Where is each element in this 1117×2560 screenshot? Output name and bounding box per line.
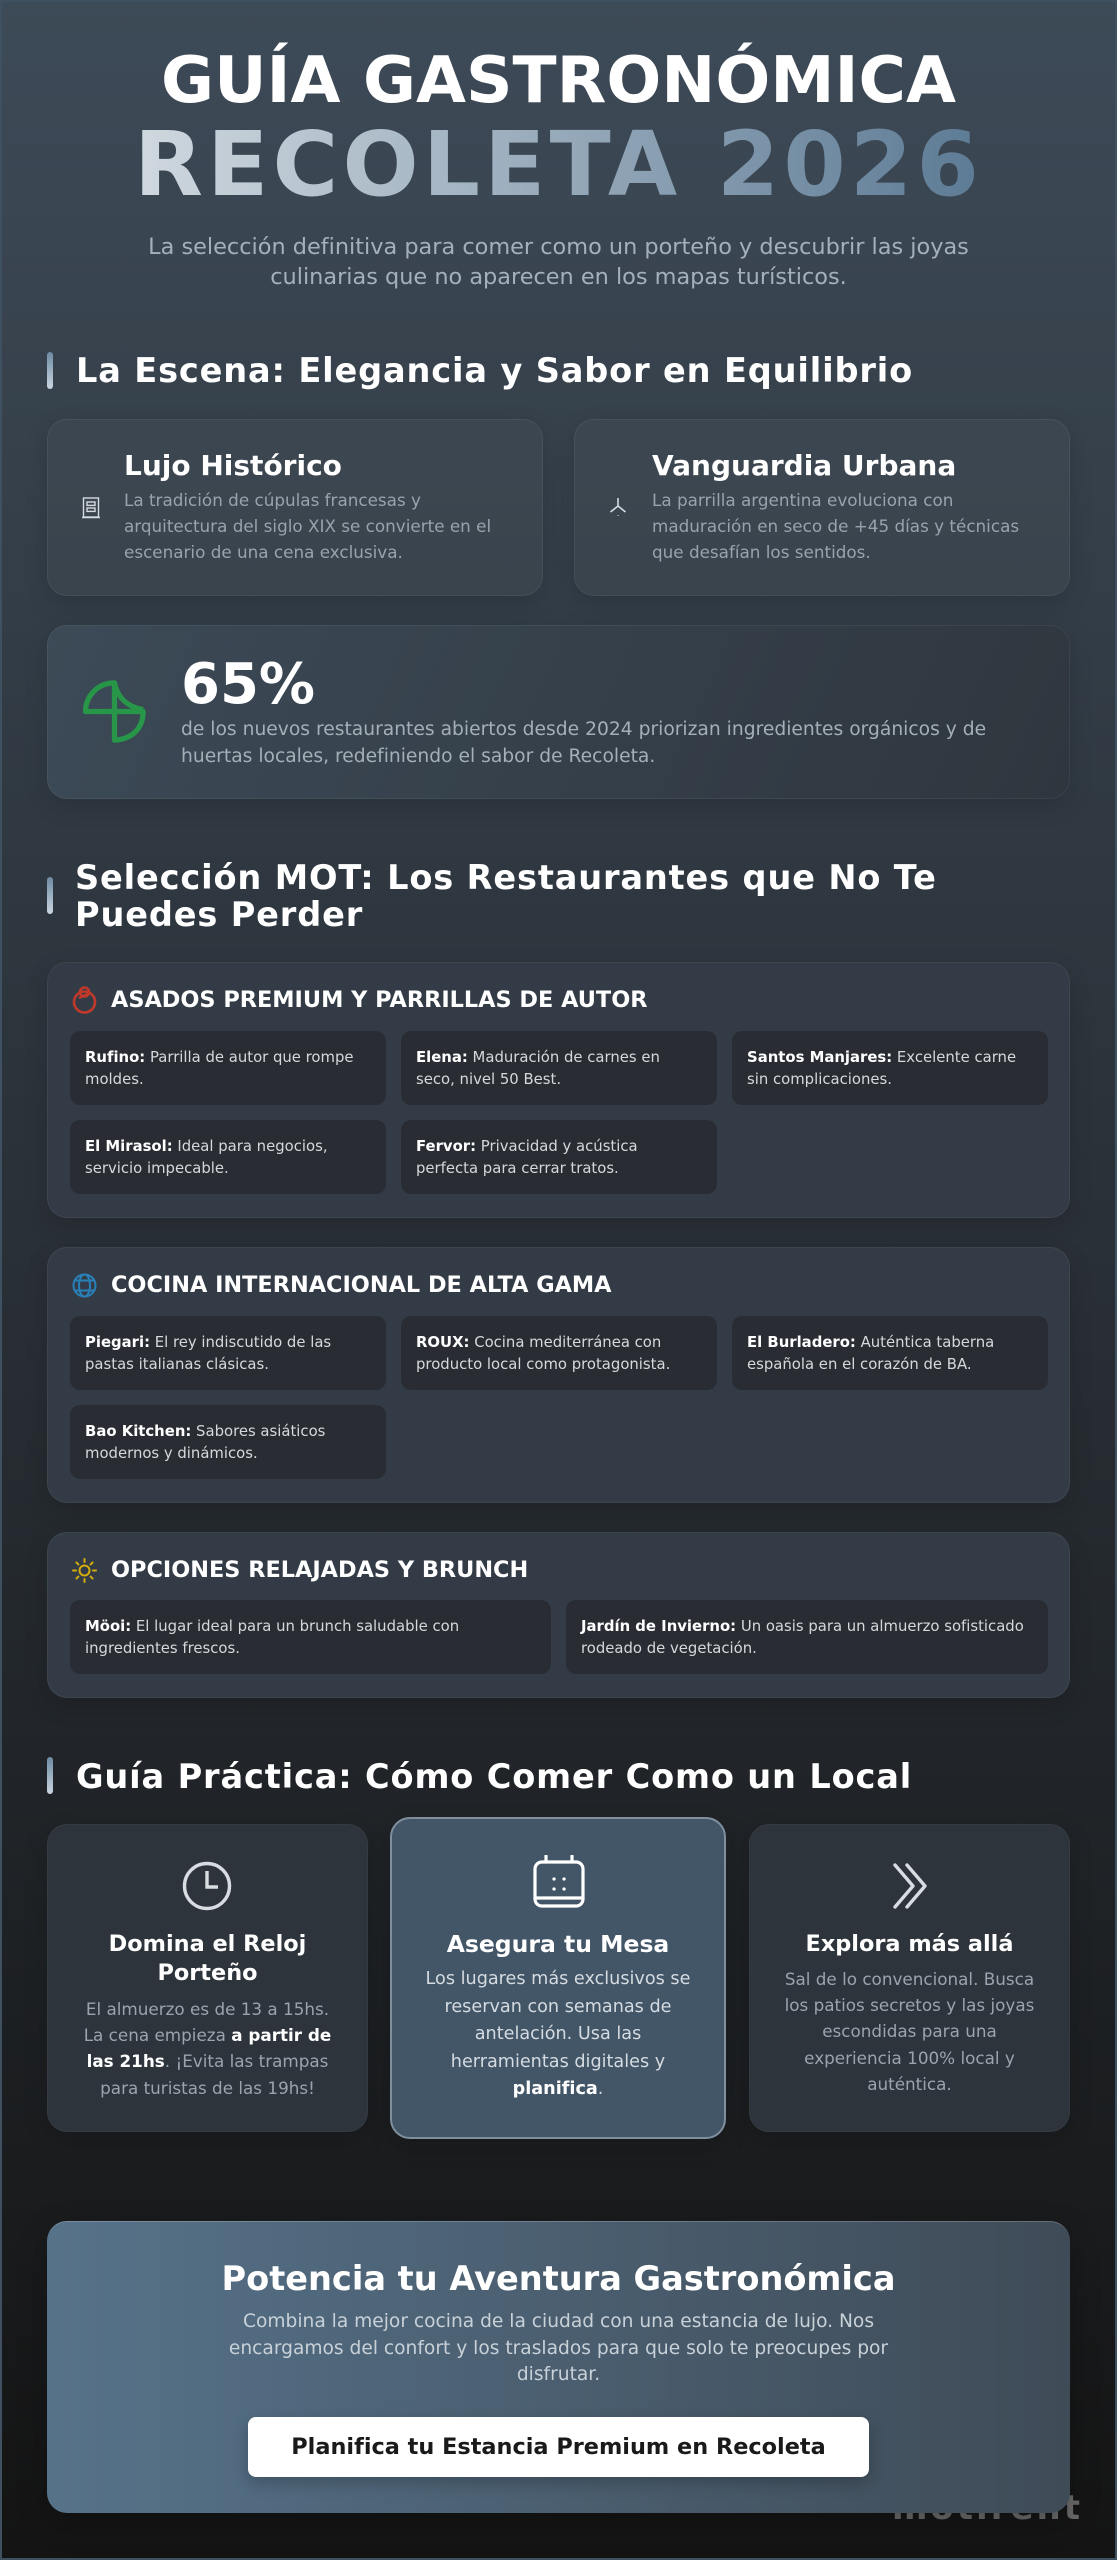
guide card: asegura tu mesa (highlighted) (390, 1817, 726, 2139)
card title: Domina el Reloj (109, 1931, 306, 1957)
item: roux: producto local como protagonista. (416, 1355, 670, 1373)
section accent: seleccion (47, 877, 53, 914)
icon: double chevron (893, 1863, 927, 1909)
item: bao kitchen (70, 1405, 386, 1479)
item: elena: Elena: Maduración de carnes en (416, 1048, 660, 1066)
card description: herramientas digitales y (451, 2052, 665, 2072)
item: elena (401, 1031, 717, 1105)
item: el mirasol (70, 1120, 386, 1194)
item: bao kitchen: modernos y dinámicos. (85, 1444, 258, 1462)
card title: Lujo Histórico (124, 449, 342, 482)
item: rufino: moldes. (85, 1070, 144, 1088)
watermark: motirent: motirent (892, 2488, 1083, 2528)
card description: arquitectura del siglo XIX se convierte en el (124, 516, 491, 536)
stat description (181, 719, 986, 767)
intro text: La selección definitiva para comer como un porteño y descubrir las joyas (148, 234, 969, 260)
card title: Asegura tu Mesa (447, 1930, 669, 1958)
cta description: Combina la mejor cocina de la ciudad con una estancia de lujo. Nos (243, 2311, 874, 2332)
item: el burladero: española en el corazón de BA. (747, 1355, 972, 1373)
card description: las 21hs. ¡Evita las trampas (87, 2051, 328, 2071)
item: el mirasol: servicio impecable. (85, 1159, 229, 1177)
item: el burladero (732, 1316, 1048, 1390)
panel heading: OPCIONES RELAJADAS Y BRUNCH (111, 1557, 528, 1583)
card description: auténtica. (867, 2074, 952, 2094)
cta panel (47, 2221, 1070, 2513)
guide card: domina el reloj (47, 1824, 368, 2132)
item: mooi (70, 1600, 551, 1674)
card description (652, 490, 1019, 562)
section heading: seleccion mot (75, 858, 937, 934)
item: roux (401, 1316, 717, 1390)
item: jardin de invierno: Jardín de Invierno: Un oasis para un almuerzo sofisticado (581, 1617, 1024, 1635)
cta description: disfrutar. (517, 2364, 600, 2385)
item: bao kitchen: Bao Kitchen: Sabores asiáticos (85, 1422, 325, 1440)
card title: Explora más allá (806, 1931, 1013, 1957)
card: lujo historico (47, 419, 543, 596)
icon: yellow sun (72, 1558, 97, 1583)
section heading: guia practica: Guía Práctica: Cómo Comer Como un Local (76, 1757, 912, 1796)
panel heading: ASADOS PREMIUM Y PARRILLAS DE AUTOR (111, 987, 647, 1013)
card description: que desafían los sentidos. (652, 542, 871, 562)
section heading: seleccion mot: Puedes Perder (75, 895, 363, 934)
item: fervor (401, 1120, 717, 1194)
item: santos manjares: sin complicaciones. (747, 1070, 892, 1088)
card description: los patios secretos y las joyas (785, 1995, 1034, 2015)
item: piegari (70, 1316, 386, 1390)
item: roux: ROUX: Cocina mediterránea con (416, 1333, 661, 1351)
section heading: la escena: La Escena: Elegancia y Sabor en Equilibrio (76, 351, 913, 390)
item: mooi: ingredientes frescos. (85, 1639, 240, 1657)
card description (785, 1969, 1034, 2094)
cta description (229, 2311, 888, 2385)
card description: La parrilla argentina evoluciona con (652, 490, 953, 510)
card description: La cena empieza a partir de (84, 2025, 331, 2045)
subtitle: recoleta 2026: RECOLETA 2026 (134, 113, 983, 217)
card description (84, 1999, 331, 2098)
card description: El almuerzo es de 13 a 15hs. (86, 1999, 329, 2019)
intro text: culinarias que no aparecen en los mapas turísticos. (270, 264, 847, 290)
icon: three-way fork (610, 498, 626, 516)
item: santos manjares (732, 1031, 1048, 1105)
item: jardin de invierno: rodeado de vegetación. (581, 1639, 757, 1657)
section accent: guia practica (47, 1757, 53, 1794)
icon: red meat (72, 986, 96, 1014)
item: jardin de invierno (566, 1600, 1048, 1674)
cta button (248, 2417, 869, 2477)
panel: asados premium (47, 962, 1070, 1218)
item: el burladero: El Burladero: Auténtica taberna (747, 1333, 994, 1351)
cta title: Potencia tu Aventura Gastronómica (222, 2259, 895, 2298)
item: mooi: Möoi: El lugar ideal para un brunch saludable con (85, 1617, 459, 1635)
item: rufino (70, 1031, 386, 1105)
card description (426, 1969, 690, 2099)
cta button: Planifica tu Estancia Premium en Recoleta (291, 2434, 826, 2460)
item: rufino: Rufino: Parrilla de autor que rompe (85, 1048, 354, 1066)
guide card: explora mas alla (749, 1824, 1070, 2132)
card title: Vanguardia Urbana (652, 449, 956, 482)
stat number: 65% (181, 652, 315, 717)
panel: cocina internacional (47, 1247, 1070, 1503)
card: vanguardia urbana (574, 419, 1070, 596)
panel heading: COCINA INTERNACIONAL DE ALTA GAMA (111, 1272, 612, 1298)
card description: La tradición de cúpulas francesas y (124, 490, 421, 510)
card description: escondidas para una (822, 2021, 997, 2041)
item: elena: seco, nivel 50 Best. (416, 1070, 561, 1088)
cta description: encargamos del confort y los traslados para que solo te preocupes por (229, 2338, 888, 2358)
item: santos manjares: Santos Manjares: Excelente carne (747, 1048, 1016, 1066)
icon: blue globe (72, 1274, 96, 1298)
card description: Sal de lo convencional. Busca (785, 1969, 1034, 1989)
card title (109, 1931, 306, 1986)
card description: escenario de una cena exclusiva. (124, 542, 403, 562)
item: fervor: Fervor: Privacidad y acústica (416, 1137, 638, 1155)
card description (124, 490, 491, 562)
icon: building (82, 497, 100, 518)
card description: reservan con semanas de (444, 1996, 672, 2016)
card description: planifica. (513, 2079, 603, 2099)
item: fervor: perfecta para cerrar tratos. (416, 1159, 619, 1177)
card description: Los lugares más exclusivos se (426, 1969, 690, 1989)
card title: Porteño (157, 1960, 258, 1986)
icon: green leaf (83, 680, 146, 743)
title: GUÍA GASTRONÓMICA (161, 43, 956, 118)
section accent: la escena (47, 352, 53, 389)
card description: antelación. Usa las (475, 2024, 641, 2044)
icon: clock (182, 1862, 232, 1910)
stat description: huertas locales, redefiniendo el sabor de Recoleta. (181, 746, 655, 767)
item: piegari: Piegari: El rey indiscutido de las (85, 1333, 331, 1351)
card description: experiencia 100% local y (804, 2048, 1015, 2068)
section heading: seleccion mot: Selección MOT: Los Restaurantes que No Te (75, 858, 937, 897)
stat description: de los nuevos restaurantes abiertos desde 2024 priorizan ingredientes orgánicos y de (181, 719, 986, 740)
card description: para turistas de las 19hs! (100, 2078, 315, 2098)
intro text (148, 234, 969, 290)
card description: maduración en seco de +45 días y técnicas (652, 516, 1019, 536)
item: piegari: pastas italianas clásicas. (85, 1355, 269, 1373)
item: el mirasol: El Mirasol: Ideal para negocios, (85, 1137, 328, 1155)
stat card: 65% (47, 625, 1070, 799)
panel: opciones relajadas (47, 1532, 1070, 1698)
icon: calendar (533, 1855, 585, 1908)
